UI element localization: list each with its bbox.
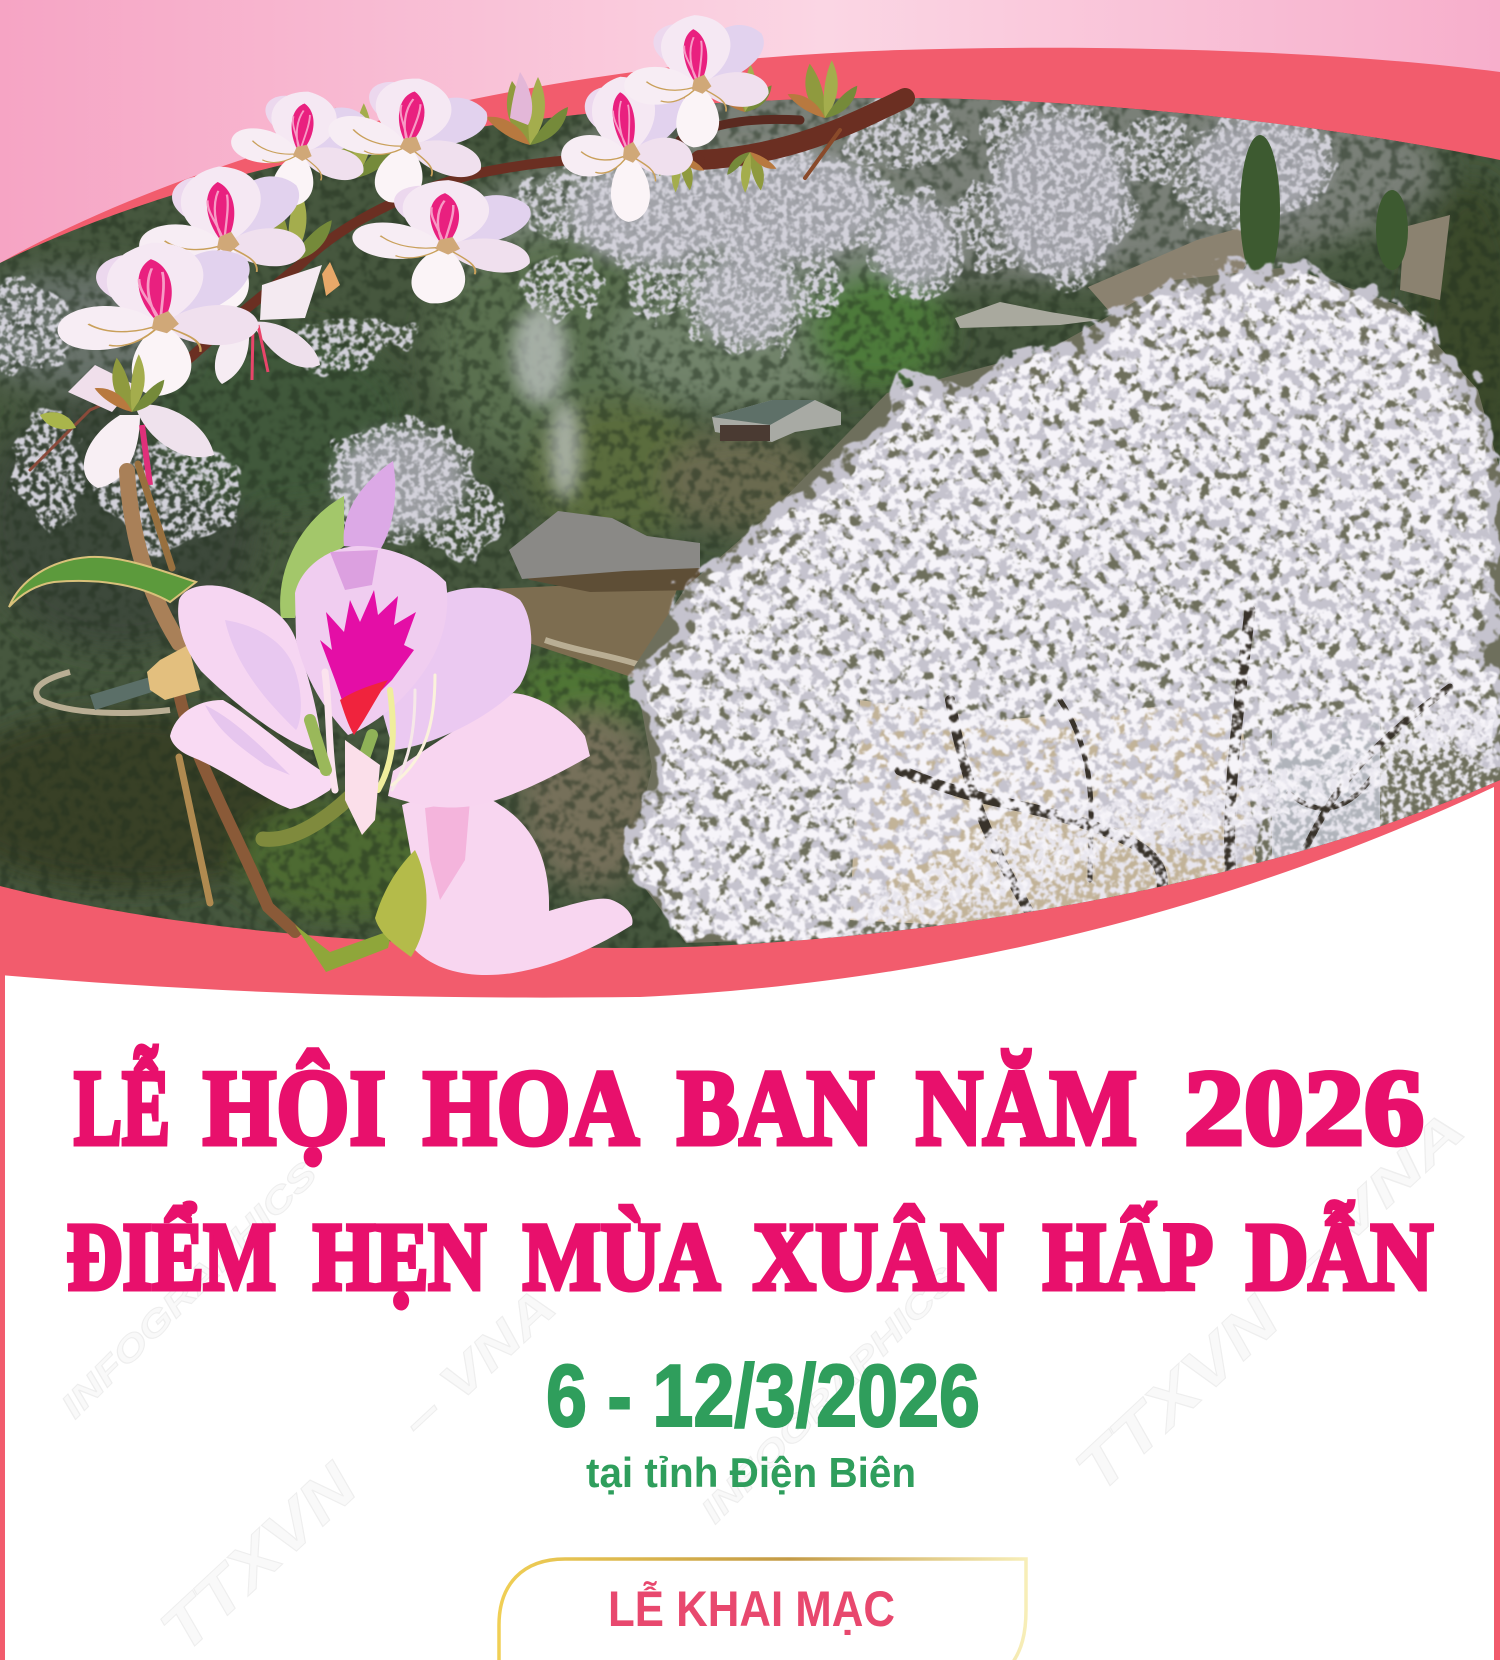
title line 2: HẤP [1043, 1203, 1213, 1310]
petal top shading [330, 550, 378, 590]
bud [344, 461, 395, 550]
bud sepal [280, 496, 344, 618]
pistil centre [345, 740, 380, 835]
dark conifer trees [1240, 135, 1408, 285]
flower 6 [348, 174, 535, 310]
red core [340, 680, 388, 735]
forest tone patches [0, 60, 1500, 920]
tan ground visible through big tree [850, 700, 1260, 930]
upper branch [30, 98, 905, 470]
title line 1: NĂM [916, 1049, 1137, 1168]
title line 2: XUÂN [753, 1203, 1003, 1310]
title line 1: 2026 [1184, 1049, 1424, 1168]
big tree blossom, grey layer [629, 267, 1500, 943]
magenta blotch [320, 590, 416, 735]
flower 7 [49, 233, 265, 406]
flower 4 [223, 82, 373, 216]
stamens [310, 672, 435, 790]
slope clearing [1088, 215, 1450, 320]
lower flower inner shading [425, 800, 470, 900]
petal right lower [388, 693, 590, 808]
main stems behind large flower [127, 464, 352, 932]
opening ceremony box [499, 1559, 1026, 1660]
flower 9 hanging [40, 354, 214, 488]
petal left lower shade [205, 705, 290, 775]
petal right upper [379, 588, 531, 750]
sparse blossom near the ground [830, 704, 1500, 938]
photo: hillside with ban blossoms and village [0, 40, 1500, 960]
small shed [90, 677, 152, 710]
opening ceremony label: LỄ KHAI MẠC [608, 1581, 895, 1637]
title line 2: HẸN [313, 1203, 486, 1310]
lower flower petal [402, 794, 633, 975]
side borders of the white panel [0, 785, 1500, 1660]
title line 1: BAN [677, 1049, 874, 1168]
watermarks: TTXVN [1062, 1283, 1293, 1505]
flower 1 [621, 11, 771, 151]
watermarks: TTXVN [147, 1450, 371, 1660]
long green leaf [9, 557, 196, 607]
watermarks [54, 1100, 1476, 1660]
smoke [512, 305, 581, 500]
title line 1: HOA [423, 1049, 639, 1168]
title line 2: MÙA [523, 1203, 720, 1310]
petal left upper [178, 585, 321, 750]
roof on ridge [955, 302, 1100, 328]
petal left upper shade [225, 620, 301, 730]
location: tại tỉnh Điện Biên [586, 1449, 916, 1496]
big tree blossom, white layer [640, 275, 1490, 943]
watermarks: – VNA [389, 1278, 566, 1448]
title line 1 [74, 1046, 1424, 1168]
petal left lower [170, 700, 335, 809]
festival date: 6 - 12/3/2026 [546, 1346, 980, 1445]
flower bud leaves on branch [242, 60, 857, 296]
title line 1: HỘI [203, 1049, 386, 1168]
soft tone under far trees [335, 115, 1327, 530]
top pink header band [0, 0, 1500, 280]
lower flower sepal [375, 850, 427, 957]
petal top [295, 546, 447, 735]
dried calyx [147, 645, 200, 700]
ground around house [493, 586, 676, 678]
flower 8 hanging [215, 265, 322, 384]
house lower [509, 511, 700, 592]
big tree trunks [900, 610, 1450, 915]
watermarks: INFOGRAPHICS [54, 1155, 325, 1426]
photo base: dark forest [0, 40, 1500, 960]
watermarks: – VNA [1269, 1100, 1476, 1298]
title line 2: ĐIỂM [67, 1203, 276, 1310]
grey stone wall behind big tree [1272, 717, 1380, 870]
flowering trees on the far hillside [0, 100, 1337, 565]
flower 5 [134, 161, 309, 317]
title line 2: DẪN [1246, 1202, 1433, 1310]
paths [36, 640, 640, 713]
mottled forest texture [0, 90, 1500, 950]
big tree under-layer [629, 267, 1500, 943]
flower 3 [318, 65, 494, 217]
flower 2 [553, 70, 699, 228]
house upper [712, 400, 841, 442]
stem to lower flower [295, 925, 392, 972]
watermarks: INFOGRAPHICS [694, 1260, 965, 1531]
title line 2 [67, 1202, 1433, 1310]
large flower [170, 546, 590, 835]
red curved frame behind the photo [0, 48, 1500, 998]
title line 1: LỄ [74, 1046, 170, 1168]
